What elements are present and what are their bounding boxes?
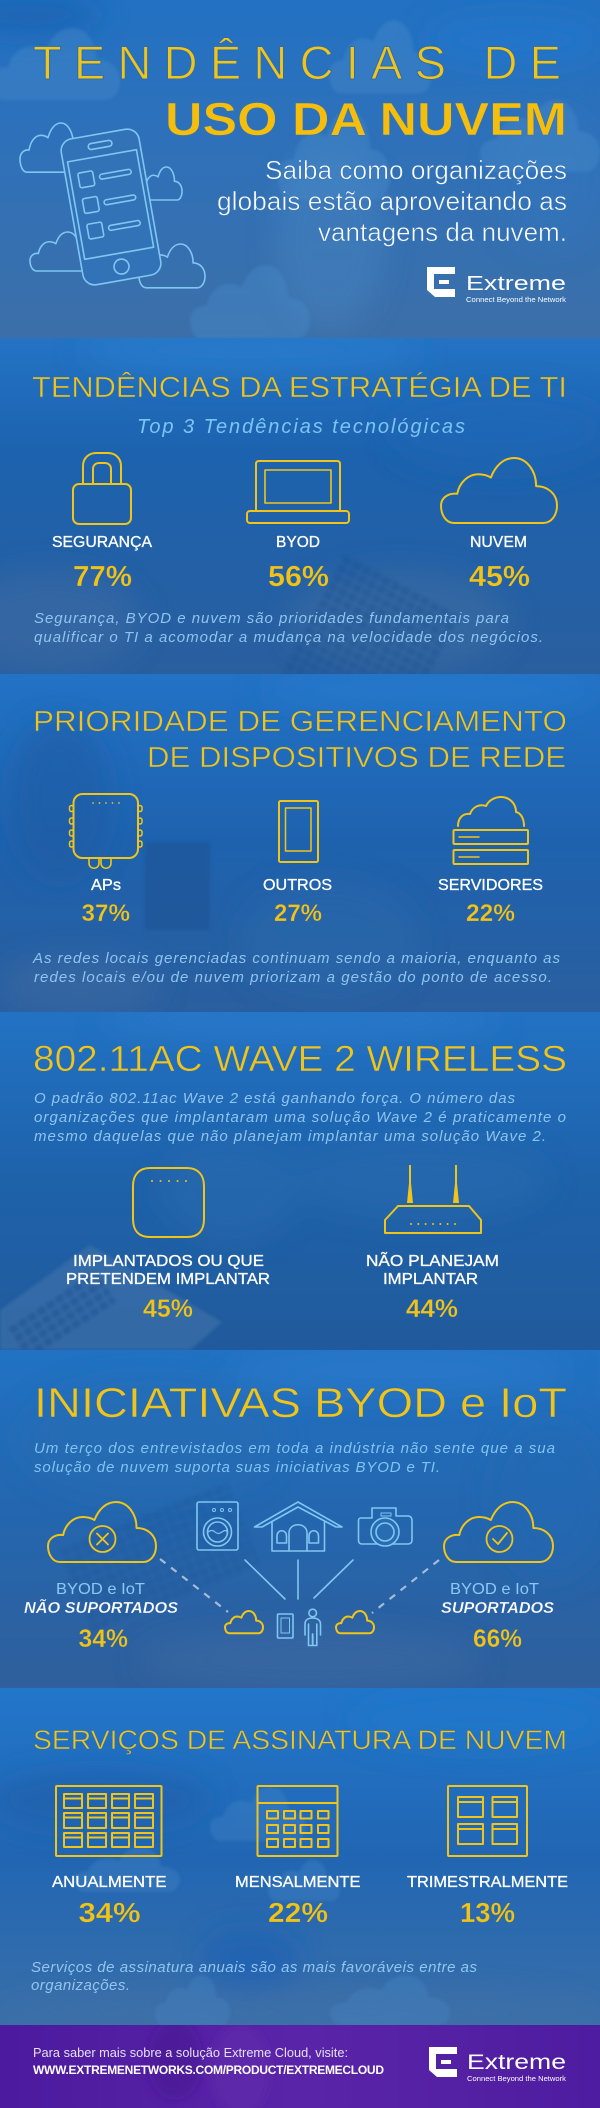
item: supported [441,1502,554,1653]
panel: footer [0,2020,600,2108]
item: yearly: 34% [78,1897,141,1928]
item: not supported: NÃO SUPORTADOS [24,1597,178,1617]
item: APs: APs [91,877,121,894]
section note: Segurança, BYOD e nuvem são prioridades fundamentais para [34,610,509,627]
icon: wave 2 access point [133,1168,204,1237]
icon: quarter calendar [448,1786,527,1856]
item: deployed [66,1168,270,1323]
title line 1: TENDÊNCIAS DE [33,36,561,89]
section heading: INICIATIVAS BYOD e IoT [34,1379,567,1426]
item: not supported: BYOD e IoT [56,1581,145,1598]
section heading: PRIORIDADE DE GERENCIAMENTO [33,706,567,738]
section note [31,1959,478,1994]
icon: month calendar [258,1786,338,1856]
icon: small phone [278,1614,293,1638]
icon: washing machine [197,1502,238,1550]
header photo background [0,0,600,340]
item: security: SEGURANÇA [52,534,153,551]
item: servers [438,797,543,927]
item: security [52,453,153,593]
item: monthly: 22% [268,1897,328,1928]
icon: person [305,1609,320,1646]
item: quarterly [407,1786,568,1928]
icon: router [385,1165,481,1233]
icon: padlock [73,453,131,524]
section photo background [0,1000,600,1362]
section note [32,950,560,986]
item: no plans: IMPLANTAR [383,1271,478,1288]
item: security: 77% [73,561,132,593]
item: servers: SERVIDORES [438,877,543,894]
section photo background [0,1688,600,2040]
section heading: DE DISPOSITIVOS DE REDE [147,742,566,774]
item: BYOD: 56% [268,561,329,593]
panel: 802.11ac wave 2 [0,1000,600,1362]
icon: access point [70,794,142,868]
icon: small clouds [225,1611,374,1633]
item: supported: SUPORTADOS [441,1600,554,1617]
section photo background [0,1345,600,1690]
panel: IT strategy trends [0,325,600,748]
logo: Extreme footer: Extreme [467,2051,566,2074]
item: servers: 22% [466,900,515,927]
subtitle: Saiba como organizações [265,155,567,185]
item: cloud: 45% [469,561,530,593]
section intro: mesmo daquelas que não planejam implantar uma solução Wave 2. [34,1128,546,1145]
item: supported: BYOD e IoT [450,1581,539,1598]
item: APs: 37% [82,900,130,927]
section photo background [0,665,600,1015]
section note: organizações. [31,1977,130,1994]
logo: Extreme footer: Connect Beyond the Network [467,2074,566,2083]
item: quarterly: 13% [460,1897,515,1928]
connection lines [245,1560,353,1599]
item: BYOD [247,461,349,593]
item: deployed: 45% [143,1295,193,1323]
dashed connection to clouds [160,1559,439,1613]
section note: Serviços de assinatura anuais são as mais favoráveis entre as [31,1959,478,1976]
section intro: solução de nuvem suporta suas iniciativas BYOD e TI. [34,1459,440,1476]
item: APs [70,794,142,927]
logo: Extreme header: Connect Beyond the Network [466,295,566,304]
section heading: TENDÊNCIAS DA ESTRATÉGIA DE TI [32,371,567,404]
footer background [0,2020,600,2108]
icon: cloud with cross [48,1502,156,1562]
item: BYOD: BYOD [276,534,320,551]
section photo background [0,325,600,748]
subtitle: globais estão aproveitando as [217,186,567,216]
section heading: SERVIÇOS DE ASSINATURA DE NUVEM [33,1725,567,1755]
panel: header [0,0,600,340]
icon: year calendar [56,1786,162,1856]
item: no plans: NÃO PLANEJAM [366,1253,499,1270]
icon: cloud with check [444,1502,553,1562]
icon: cloud servers [454,797,528,864]
icon: tablet [279,801,318,862]
section note: qualificar o TI a acomodar a mudança na velocidade dos negócios. [34,629,543,646]
item: yearly [52,1786,166,1928]
item: not supported: 34% [78,1625,128,1653]
subtitle: vantagens da nuvem. [318,217,567,247]
logo: Extreme header: Extreme [466,273,566,295]
panel: BYOD and IoT [0,1345,600,1690]
section note: redes locais e/ou de nuvem priorizam a gestão do ponto de acesso. [34,969,552,986]
icon: cloud [441,458,557,523]
item: others: OUTROS [263,877,332,894]
item: no plans [366,1165,499,1323]
item: cloud: NUVEM [470,534,527,551]
item: deployed: IMPLANTADOS OU QUE [73,1253,264,1270]
item: others: 27% [274,900,322,927]
subtitle [217,155,567,247]
item: not supported [24,1502,178,1653]
panel: subscription services [0,1688,600,2040]
section heading [33,706,567,774]
icon: phone with clouds [20,123,205,288]
item: yearly: ANUALMENTE [52,1874,166,1891]
section note: As redes locais gerenciadas continuam sendo a maioria, enquanto as [32,950,560,967]
item: cloud [441,458,557,593]
footer link: WWW.EXTREMENETWORKS.COM/PRODUCT/EXTREMECLOUD [33,2063,384,2077]
IoT device diagram [160,1502,439,1646]
item: others [263,801,332,927]
section intro: O padrão 802.11ac Wave 2 está ganhando força. O número das [34,1090,516,1107]
item: deployed: PRETENDEM IMPLANTAR [66,1271,270,1288]
icon: camera [358,1508,412,1546]
section intro [34,1440,555,1476]
subheading: Top 3 Tendências tecnológicas [137,416,465,438]
item: quarterly: TRIMESTRALMENTE [407,1874,568,1891]
icon: house [254,1502,342,1551]
item: no plans: 44% [406,1295,458,1323]
icon: laptop [247,461,349,523]
logo: Extreme footer [429,2047,566,2083]
panel: device management priority [0,665,600,1015]
footer text: Para saber mais sobre a solução Extreme Cloud, visite: [33,2045,348,2060]
section intro: organizações que implantaram uma solução Wave 2 é praticamente o [34,1109,566,1126]
item: monthly: MENSALMENTE [235,1874,360,1891]
section heading: 802.11AC WAVE 2 WIRELESS [33,1038,567,1079]
section intro: Um terço dos entrevistados em toda a indústria não sente que a sua [34,1440,555,1457]
title line 2: USO DA NUVEM [165,93,567,145]
item: monthly [235,1786,360,1928]
item: supported: 66% [473,1625,522,1653]
section note [34,610,543,646]
section intro [34,1090,566,1145]
logo: Extreme header [427,267,566,304]
